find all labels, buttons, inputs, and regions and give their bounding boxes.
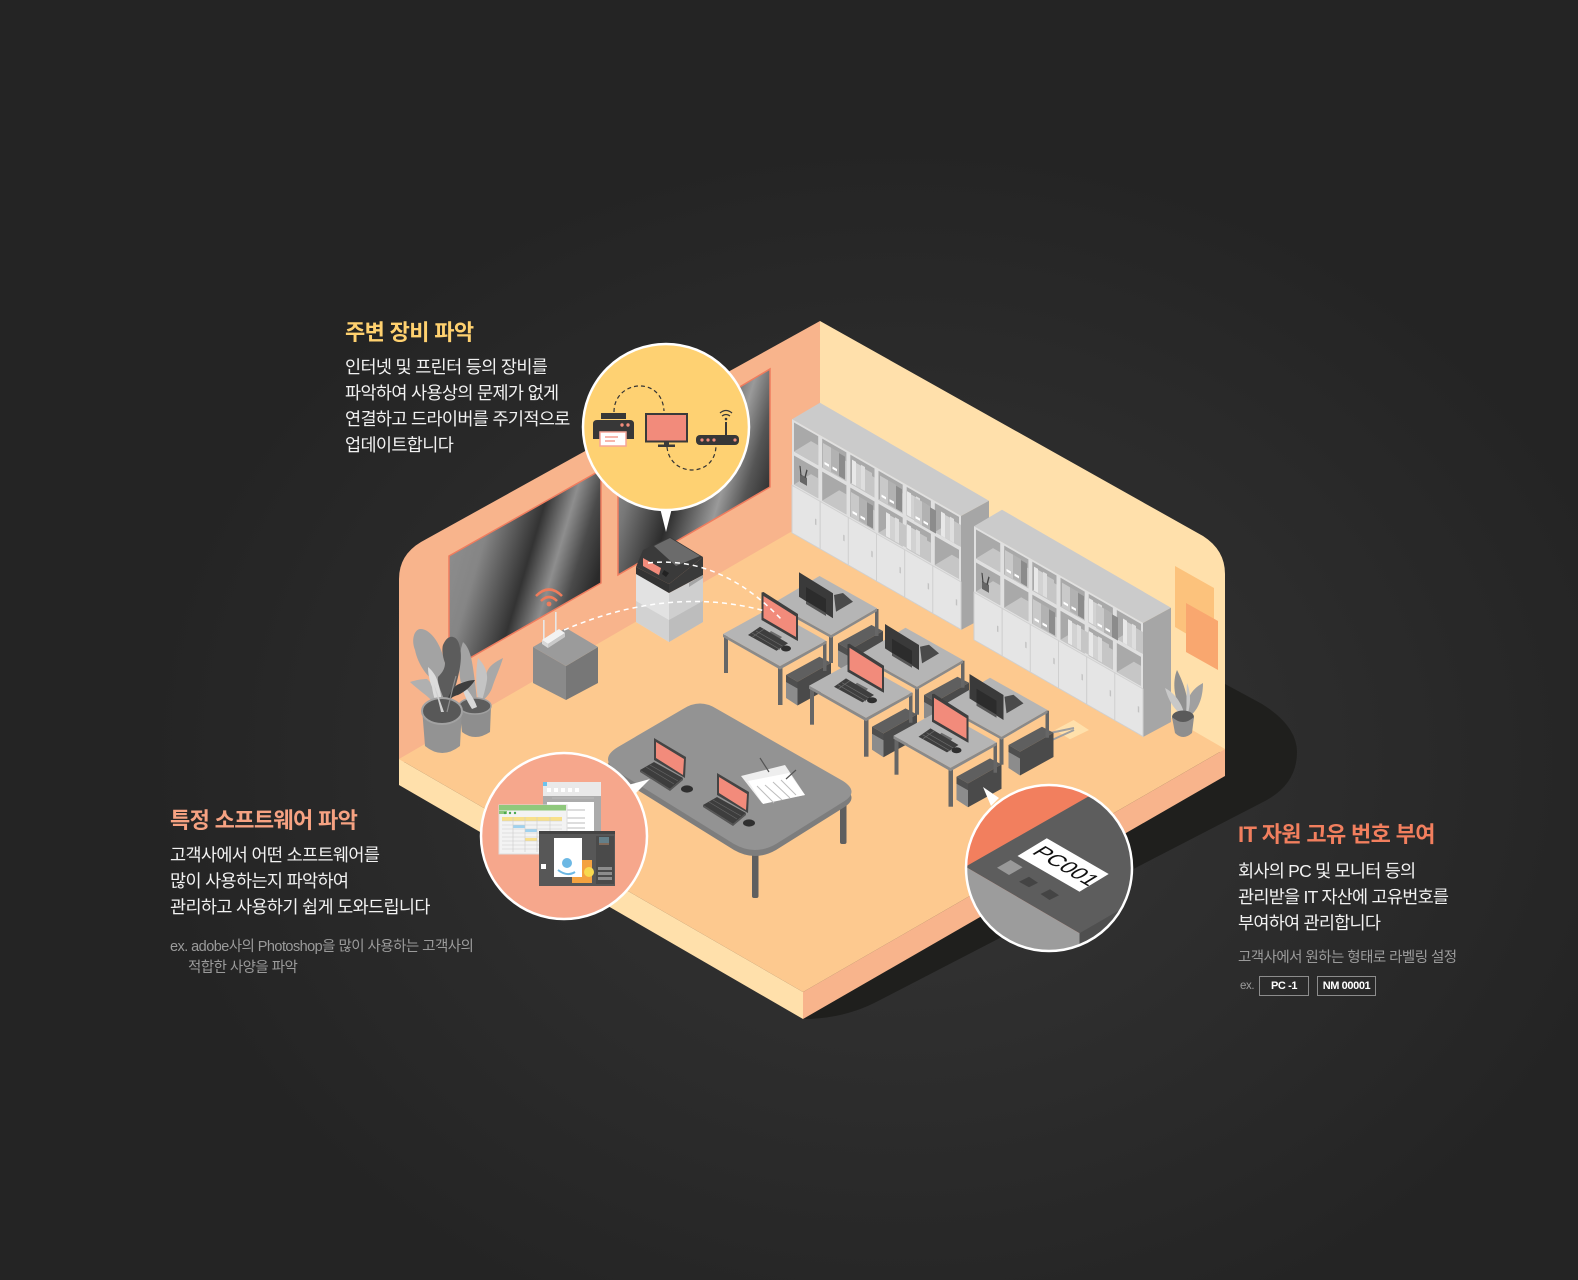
room walls [399,321,1225,765]
text block: asset numbering [1238,822,1457,966]
text block: peripherals [345,320,570,455]
illustration: isometric office room [399,321,1297,1019]
body: peripherals: 업데이트합니다 [345,435,453,455]
tag: NM 00001 [1317,976,1376,996]
room floor and slab [399,515,1225,1019]
body: software: 고객사에서 어떤 소프트웨어를 [170,845,379,865]
icon: printer [593,413,634,446]
icon: design tool window [539,831,615,886]
right plant [1165,670,1203,737]
asset label text: PC001 [1027,843,1106,889]
left plants [410,629,503,753]
note: software example: 적합한 사양을 파악 [188,960,297,976]
posters on right wall [1175,566,1218,670]
tag: PC-1: PC -1 [1271,980,1297,992]
text block: software [170,808,473,976]
desk cluster back row [774,572,1054,776]
network dashed lines [564,562,782,630]
side table with router [533,612,598,700]
desk cluster front row [723,592,1002,807]
body: asset numbering: 회사의 PC 및 모니터 등의 [1238,861,1415,881]
note: labeling: 고객사에서 원하는 형태로 라벨링 설정 [1238,950,1457,966]
body: peripherals: 파악하여 사용상의 문제가 없게 [345,383,558,403]
body: asset numbering [1238,861,1448,933]
icon: router [696,410,739,445]
body: asset numbering: 관리받을 IT 자산에 고유번호를 [1238,887,1448,907]
body: peripherals: 인터넷 및 프린터 등의 장비를 [345,357,547,377]
floor outlet and cable [1050,720,1089,740]
callout circle: software [481,753,650,919]
heading: peripherals: 주변 장비 파악 [345,320,473,345]
body: peripherals [345,357,570,455]
cabinet left [792,403,989,630]
heading: asset numbering: IT 자원 고유 번호 부여 [1238,822,1435,847]
callout circle: asset label [964,784,1134,952]
meeting table [608,704,852,898]
heading: software: 특정 소프트웨어 파악 [170,808,357,833]
icon: wifi signal [536,590,562,606]
body: software [170,845,430,917]
icon: spreadsheet window [499,805,567,854]
example prefix: ex. [1240,980,1254,992]
tag: NM 00001: NM 00001 [1323,980,1370,992]
note: software example [170,938,473,976]
icon: dashed links [614,386,716,470]
body: asset numbering: 부여하여 관리합니다 [1238,913,1380,933]
icon: monitor [646,414,687,447]
body: peripherals: 연결하고 드라이버를 주기적으로 [345,409,570,429]
body: software: 많이 사용하는지 파악하여 [170,871,348,891]
windows on left wall [449,369,770,670]
body: software: 관리하고 사용하기 쉽게 도와드립니다 [170,897,430,917]
icon: document window [543,782,601,837]
tag: PC-1 [1259,976,1309,996]
note: software example: ex. adobe사의 Photoshop을 많이 사용하는 고객사의 [170,939,473,955]
printer [636,537,703,642]
callout circle: peripherals [583,344,749,532]
ground shadow [803,684,1297,1019]
cabinet right [974,510,1171,737]
